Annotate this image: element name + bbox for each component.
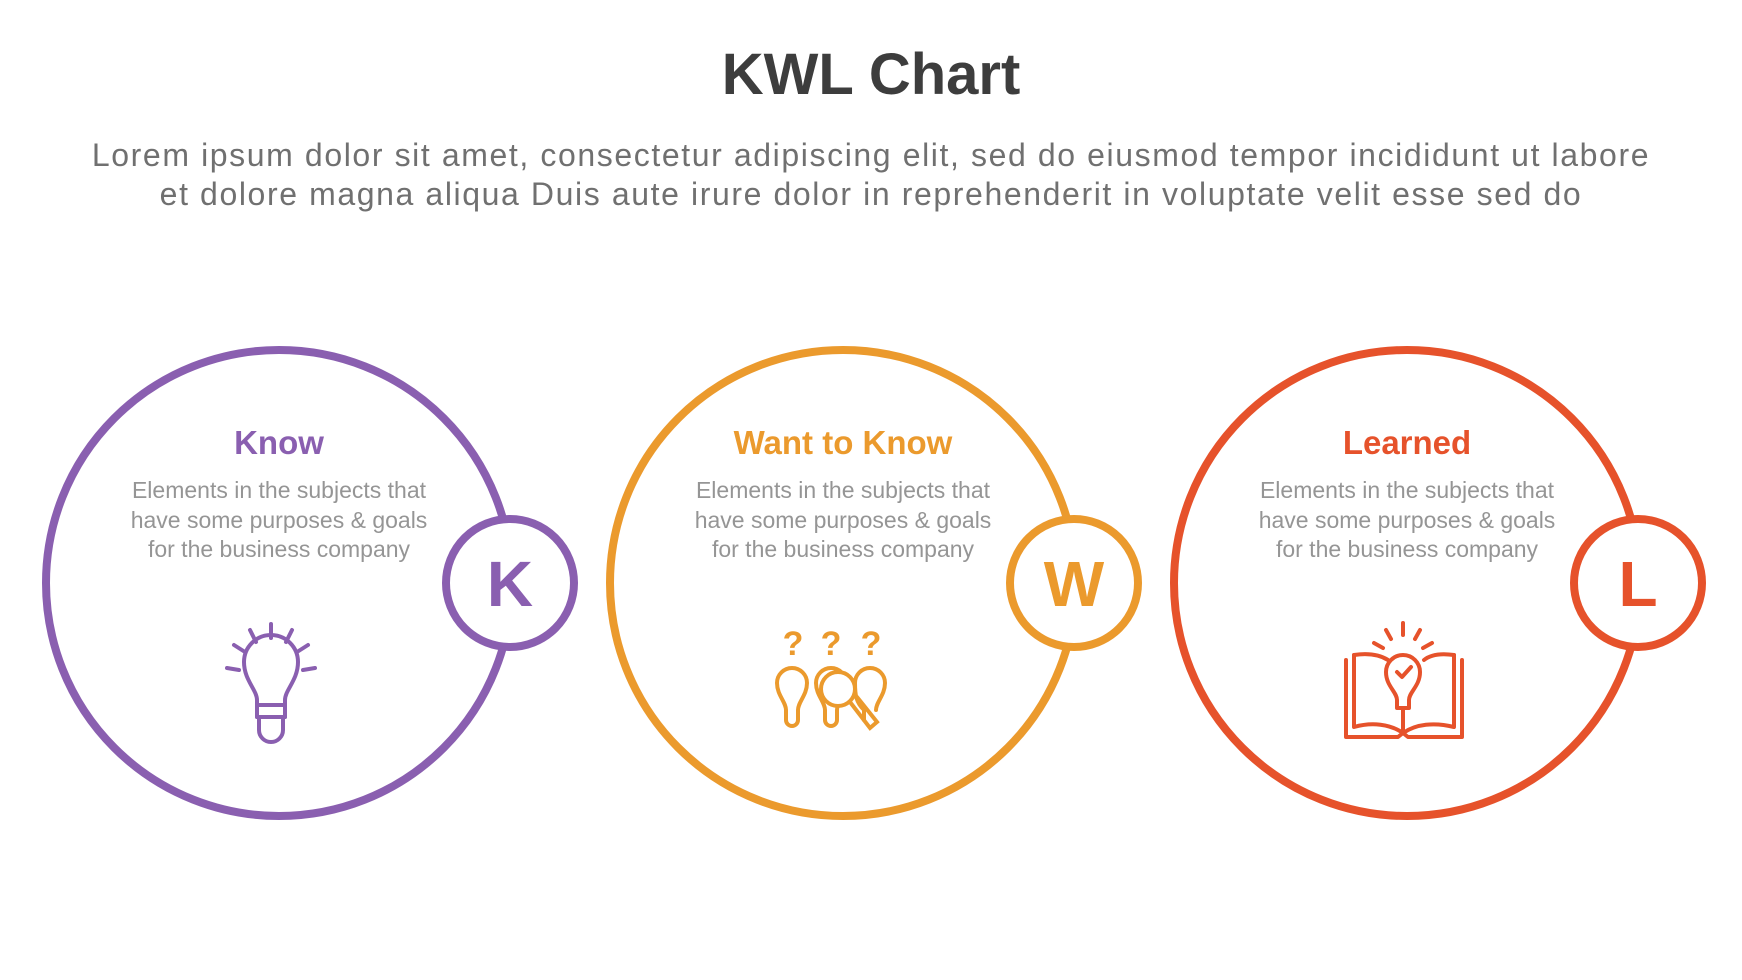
panel: know: have some purposes & goals — [131, 507, 427, 533]
subtitle text: et dolore magna aliqua Duis aute irure dolor in reprehenderit in voluptate velit esse sed do — [160, 176, 1582, 212]
panel: learned: for the business company — [1276, 536, 1539, 562]
panel: want to know: Elements in the subjects that — [696, 477, 991, 503]
panel: learned — [1174, 350, 1702, 816]
panel: know — [46, 350, 574, 816]
panel: know: Know — [234, 424, 324, 461]
panel: know: K — [487, 548, 533, 620]
icon: book with bulb — [1346, 623, 1462, 737]
panel: want to know — [610, 350, 1138, 816]
title: KWL Chart — [722, 42, 1020, 107]
subtitle text — [92, 137, 1650, 212]
panel: want to know: for the business company — [712, 536, 975, 562]
panel: know: for the business company — [148, 536, 411, 562]
panel: want to know: Want to Know — [734, 424, 953, 461]
icon: bulbs with magnifier: ? — [861, 625, 881, 663]
panel: learned: Elements in the subjects that — [1260, 477, 1555, 503]
panel: learned: L — [1618, 548, 1658, 620]
icon: lightbulb — [227, 624, 315, 742]
panel: know: Elements in the subjects that — [132, 477, 427, 503]
panel: want to know: W — [1044, 548, 1105, 620]
icon: bulbs with magnifier: ? — [821, 625, 841, 663]
subtitle text: Lorem ipsum dolor sit amet, consectetur adipiscing elit, sed do eiusmod tempor incididunt ut labore — [92, 137, 1650, 173]
panel: learned: Learned — [1343, 424, 1471, 461]
panel: want to know: have some purposes & goals — [695, 507, 991, 533]
panel: learned: have some purposes & goals — [1259, 507, 1555, 533]
icon: bulbs with magnifier: ? — [783, 625, 803, 663]
icon: bulbs with magnifier — [777, 625, 885, 728]
